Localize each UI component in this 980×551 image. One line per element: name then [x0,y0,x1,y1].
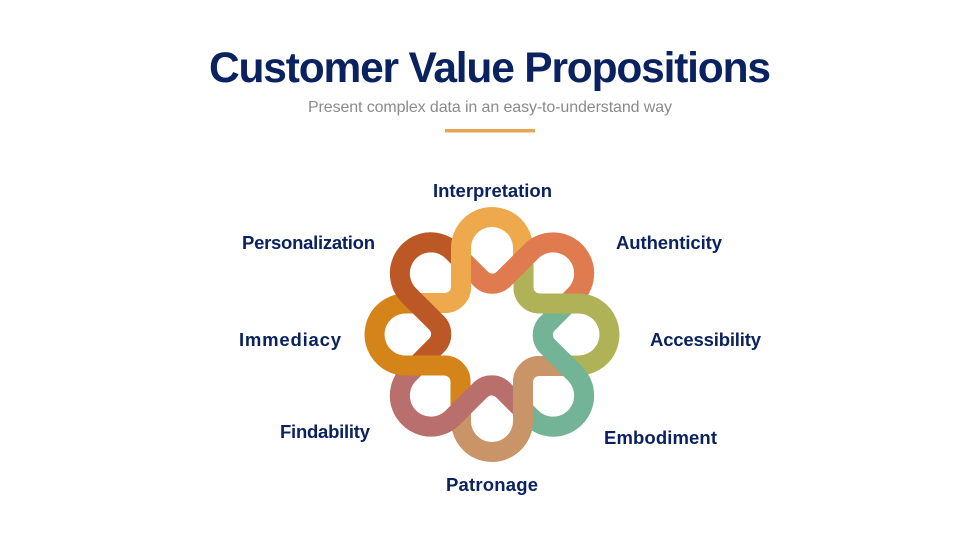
petal: Accessibility [524,288,609,356]
title underline accent [445,129,535,132]
label: Embodiment: Embodiment [604,427,717,448]
petal: Findability [393,341,503,451]
title: Customer Value Propositions [209,45,771,92]
label: Interpretation: Interpretation [433,180,552,201]
petal: Patronage [470,366,539,452]
petal: Personalization [376,236,485,345]
label: Accessibility: Accessibility [650,329,762,350]
petal: Embodiment [499,324,608,433]
interlaced petal ends layer [359,201,625,468]
label: Patronage: Patronage [446,474,538,495]
petal: Interpretation [445,217,514,303]
label: Findability: Findability [280,421,371,442]
label: Personalization: Personalization [242,232,375,253]
label: Immediacy: Immediacy [239,329,342,350]
label: Authenticity: Authenticity [616,232,723,253]
subtitle: Present complex data in an easy-to-understand way [308,99,672,116]
petal: Immediacy [375,313,460,382]
petal: Authenticity [481,218,591,328]
